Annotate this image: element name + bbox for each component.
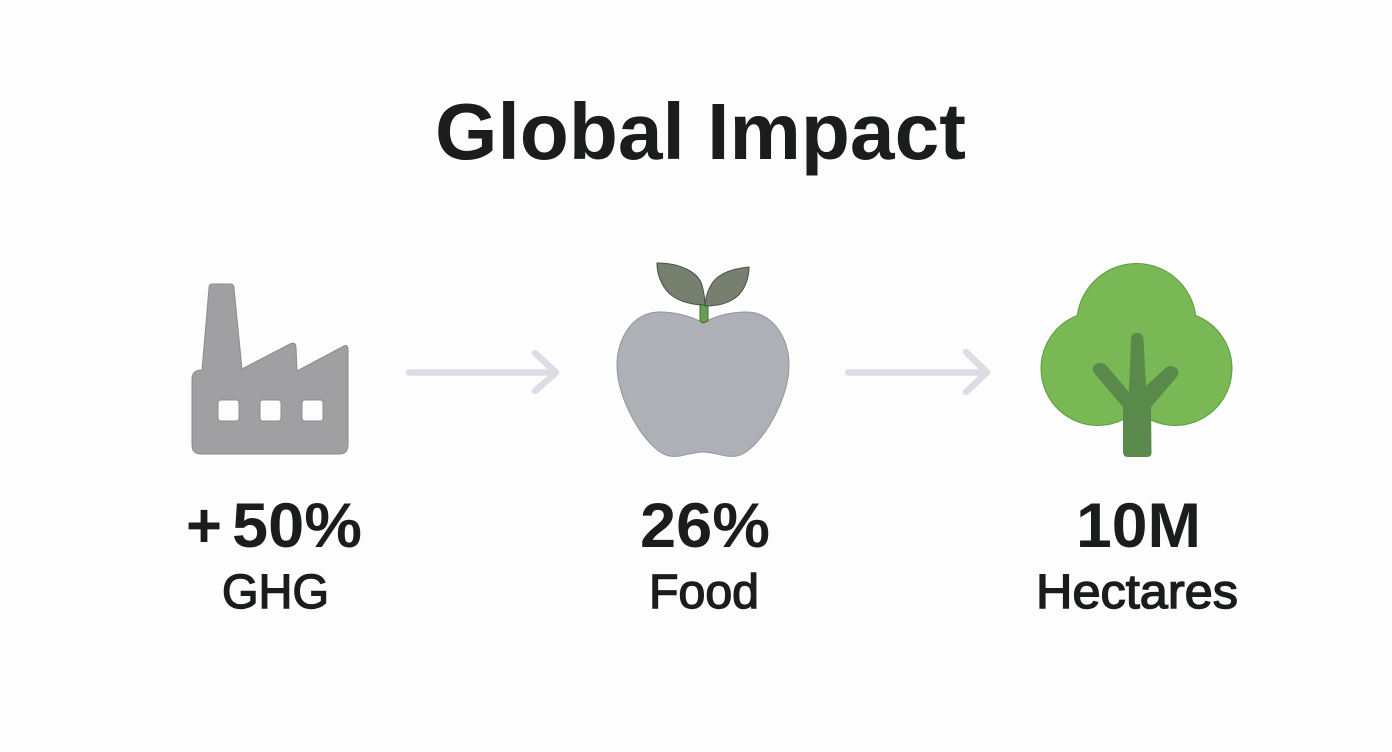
value: 26% xyxy=(640,491,770,561)
tree crown xyxy=(1041,264,1232,425)
left leaf xyxy=(657,263,705,305)
right leaf xyxy=(705,267,749,306)
tree trunk xyxy=(1093,333,1178,457)
value: 10M xyxy=(1076,491,1201,561)
label: Hectares xyxy=(1036,566,1238,619)
stat: 10M Hectares xyxy=(1036,491,1238,619)
apple body xyxy=(617,312,789,456)
arrow: food to hectares xyxy=(848,352,987,392)
stat: 26% Food xyxy=(640,491,770,619)
icon: apple xyxy=(617,263,789,456)
value: + xyxy=(186,491,222,561)
label: GHG xyxy=(222,566,329,619)
icon: factory xyxy=(192,284,348,454)
value: 50% xyxy=(232,491,362,561)
stat: +50% GHG xyxy=(186,491,362,619)
label: Food xyxy=(649,566,759,619)
icon: tree xyxy=(1041,264,1232,457)
apple stem xyxy=(700,305,708,323)
arrow: factory to food xyxy=(409,353,556,391)
title: Global Impact xyxy=(435,87,966,176)
